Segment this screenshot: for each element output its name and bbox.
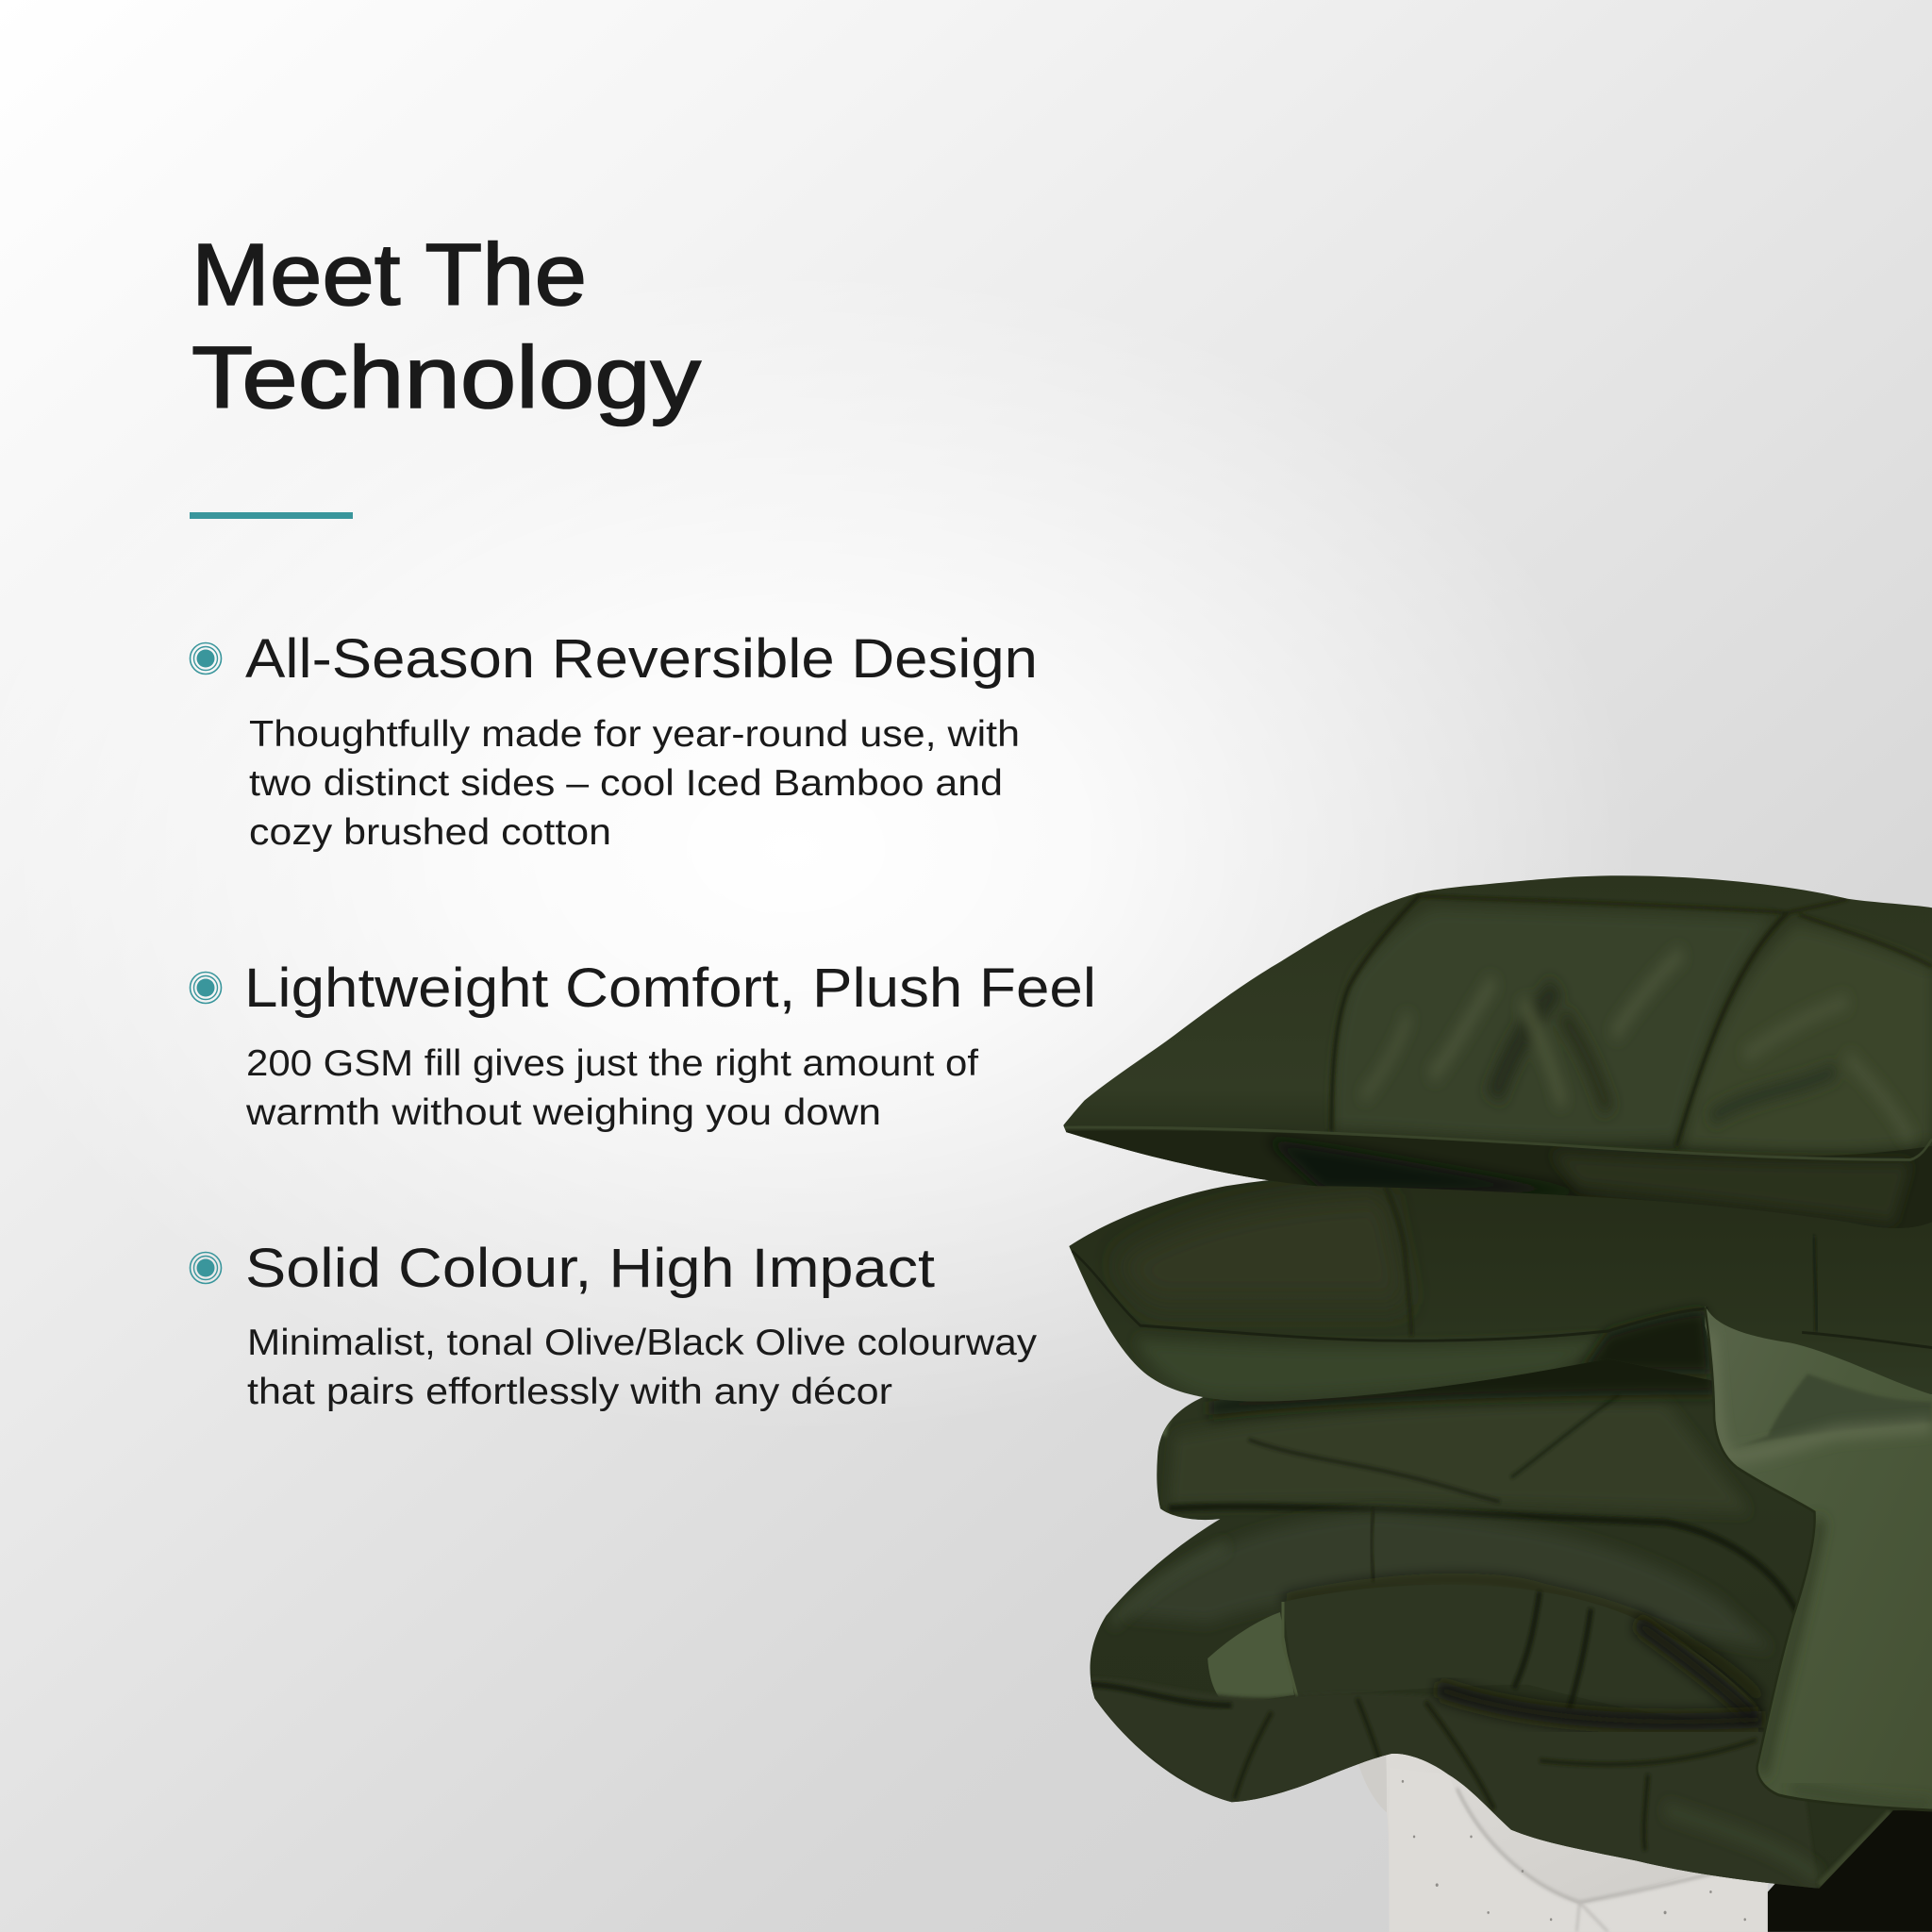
body text: all-season: [249, 714, 1020, 853]
bottom shadow band: [1066, 1130, 1932, 1181]
product photo: stacked olive bedding on stone stand: [1060, 870, 1932, 1932]
feature 2: lightweight comfort: [191, 958, 1096, 1133]
body text: all-season: two distinct sides – cool Iced Bamboo and: [249, 763, 1003, 804]
icon: teal target bullet: [191, 972, 221, 1004]
body text: lightweight comfort: warmth without weighing you down: [245, 1092, 881, 1133]
stone pedestal: [1355, 1747, 1768, 1932]
title underline accent: [190, 512, 353, 519]
upper fold highlights: [1174, 1406, 1737, 1507]
icon: teal target bullet: [191, 643, 221, 674]
fabric wrinkles: [1363, 953, 1910, 1139]
main artwork: [189, 240, 1932, 1932]
piping seam: [1065, 1127, 1932, 1159]
centre panel shading: [1334, 908, 1774, 1141]
heading: all-season: All-Season Reversible Design: [245, 628, 1038, 690]
heading: solid colour: Solid Colour, High Impact: [245, 1238, 935, 1299]
title: Meet The: [192, 225, 587, 324]
body text: all-season: cozy brushed cotton: [249, 812, 611, 853]
quilting seams: [1331, 894, 1932, 1146]
upper pillow: [1060, 870, 1932, 1236]
folded comforter body: [1091, 1358, 1904, 1889]
body text: lightweight comfort: 200 GSM fill gives just the right amount of: [246, 1043, 978, 1084]
body text: all-season: Thoughtfully made for year-round use, with: [249, 714, 1020, 755]
reversed lighter comforter flap: [1699, 1298, 1932, 1823]
inner fold panel: [1285, 1587, 1749, 1698]
body text: solid colour: Minimalist, tonal Olive/Black Olive colourway: [247, 1323, 1038, 1363]
heading: lightweight comfort: Lightweight Comfort, Plush Feel: [244, 958, 1096, 1019]
lower pillow: [1060, 1167, 1932, 1408]
body text: solid colour: [247, 1323, 1038, 1412]
dark shadow block behind stand: [1768, 1802, 1932, 1932]
title: Technology: [192, 328, 702, 426]
middle roll: [1124, 1512, 1774, 1650]
feature 1: all-season reversible design: [191, 628, 1038, 853]
icon: teal target bullet: [191, 1253, 221, 1283]
body text: solid colour: that pairs effortlessly with any décor: [247, 1372, 892, 1412]
body text: lightweight comfort: [245, 1043, 978, 1133]
title: [192, 225, 702, 426]
lower roll and folds: [1089, 1678, 1819, 1899]
inner cuff: lighter reverse side: [1208, 1612, 1294, 1706]
feature 3: solid colour: [191, 1238, 1038, 1412]
right panel shading: [1682, 925, 1932, 1152]
